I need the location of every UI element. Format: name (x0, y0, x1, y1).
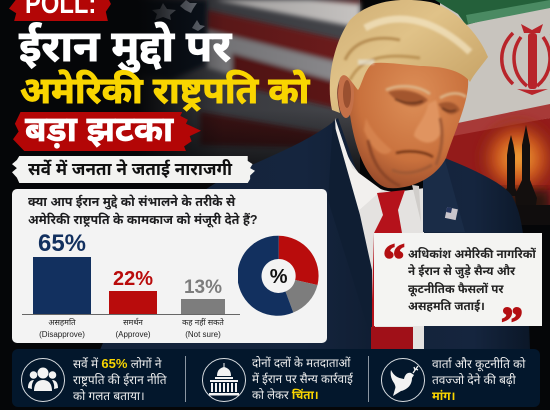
quote text (408, 247, 536, 313)
question: क्या आप ईरान मुद्दे को संभालने के तरीके से (28, 195, 235, 209)
text: stat 3 (432, 357, 526, 403)
text: stat 2 (252, 356, 353, 402)
icon: people (21, 358, 65, 402)
poll tag (9, 0, 112, 21)
label: not sure: (Not sure) (185, 330, 221, 338)
quote card (374, 233, 542, 326)
quote text: अधिकांश अमेरिकी नागरिकों (408, 248, 536, 261)
quote text: असहमति जताई। (408, 300, 485, 313)
value 13: 13% (184, 277, 222, 298)
trump figure (100, 0, 530, 350)
label: disapprove: (Disapprove) (39, 330, 85, 338)
iran emblem (502, 33, 550, 86)
suit (100, 118, 440, 350)
quote text: ने ईरान से जुड़े सैन्य और (408, 265, 515, 278)
text: stat 1: को गलत बताया। (73, 389, 144, 403)
icon: dove (381, 358, 425, 402)
text: stat 3: वार्ता और कूटनीति को (432, 357, 525, 371)
bar: approve (109, 268, 157, 314)
title line 2: अमेरिकी राष्ट्रपति को (20, 70, 309, 111)
text: stat 3: तवज्जो देने की बढ़ी (432, 373, 516, 387)
text: stat 1 (73, 356, 167, 403)
question: अमेरिकी राष्ट्रपति के कामकाज को मंजूरी देते हैं? (28, 213, 258, 227)
axis (22, 314, 240, 315)
dark right lower background (512, 225, 550, 350)
text: stat 2: को लेकर चिंता। (252, 389, 319, 402)
label: approve: (Approve) (115, 330, 151, 338)
subtitle text: सर्वे में जनता ने जताई नाराजगी (28, 159, 232, 179)
donut chart: % (270, 266, 288, 288)
text: stat 1: सर्वे में 65% लोगों ने (73, 356, 162, 371)
label: disapprove (39, 318, 85, 338)
donut chart (238, 236, 319, 316)
panel: poll chart (12, 189, 327, 343)
eyes and features (364, 86, 466, 186)
shirt collar (335, 118, 382, 212)
text: stat 2: दोनों दलों के मतदाताओं (252, 357, 350, 370)
hair (330, 0, 488, 113)
label: approve (115, 318, 151, 338)
label: approve: समर्थन (123, 318, 143, 327)
question (28, 194, 258, 228)
american flag (0, 0, 360, 190)
tie (372, 190, 412, 350)
title line 1: ईरान मुद्दो पर (19, 23, 231, 71)
closing quote mark: ” (501, 298, 523, 347)
value 65: 65% (38, 230, 86, 257)
neck and face (347, 47, 468, 188)
divider (368, 356, 369, 402)
divider (185, 356, 186, 402)
opening quote mark: “ (383, 235, 405, 284)
title banner text: बड़ा झटका (25, 110, 173, 149)
label: not sure: कह नहीं सकते (182, 318, 224, 327)
lapel (423, 160, 465, 232)
label: disapprove: असहमति (48, 318, 76, 327)
iranian flag (435, 0, 550, 240)
quote text: कूटनीतिक फैसलों पर (408, 283, 503, 296)
bar: not sure (181, 277, 225, 314)
text: stat 3: मांग। (432, 389, 455, 403)
label: not sure (182, 318, 224, 338)
text: stat 1: राष्ट्रपति की ईरान नीति (73, 373, 167, 387)
bar: disapprove (33, 230, 91, 314)
flag pin (445, 207, 458, 220)
text: stat 2: में ईरान पर सैन्य कार्रवाई (252, 373, 353, 386)
bottom strip (12, 349, 540, 407)
value 22: 22% (113, 268, 153, 290)
subtitle strip (12, 156, 255, 183)
ear (338, 70, 354, 118)
shirt (335, 118, 425, 350)
missiles (502, 135, 519, 196)
title banner (13, 112, 201, 151)
icon: capitol (202, 358, 246, 402)
